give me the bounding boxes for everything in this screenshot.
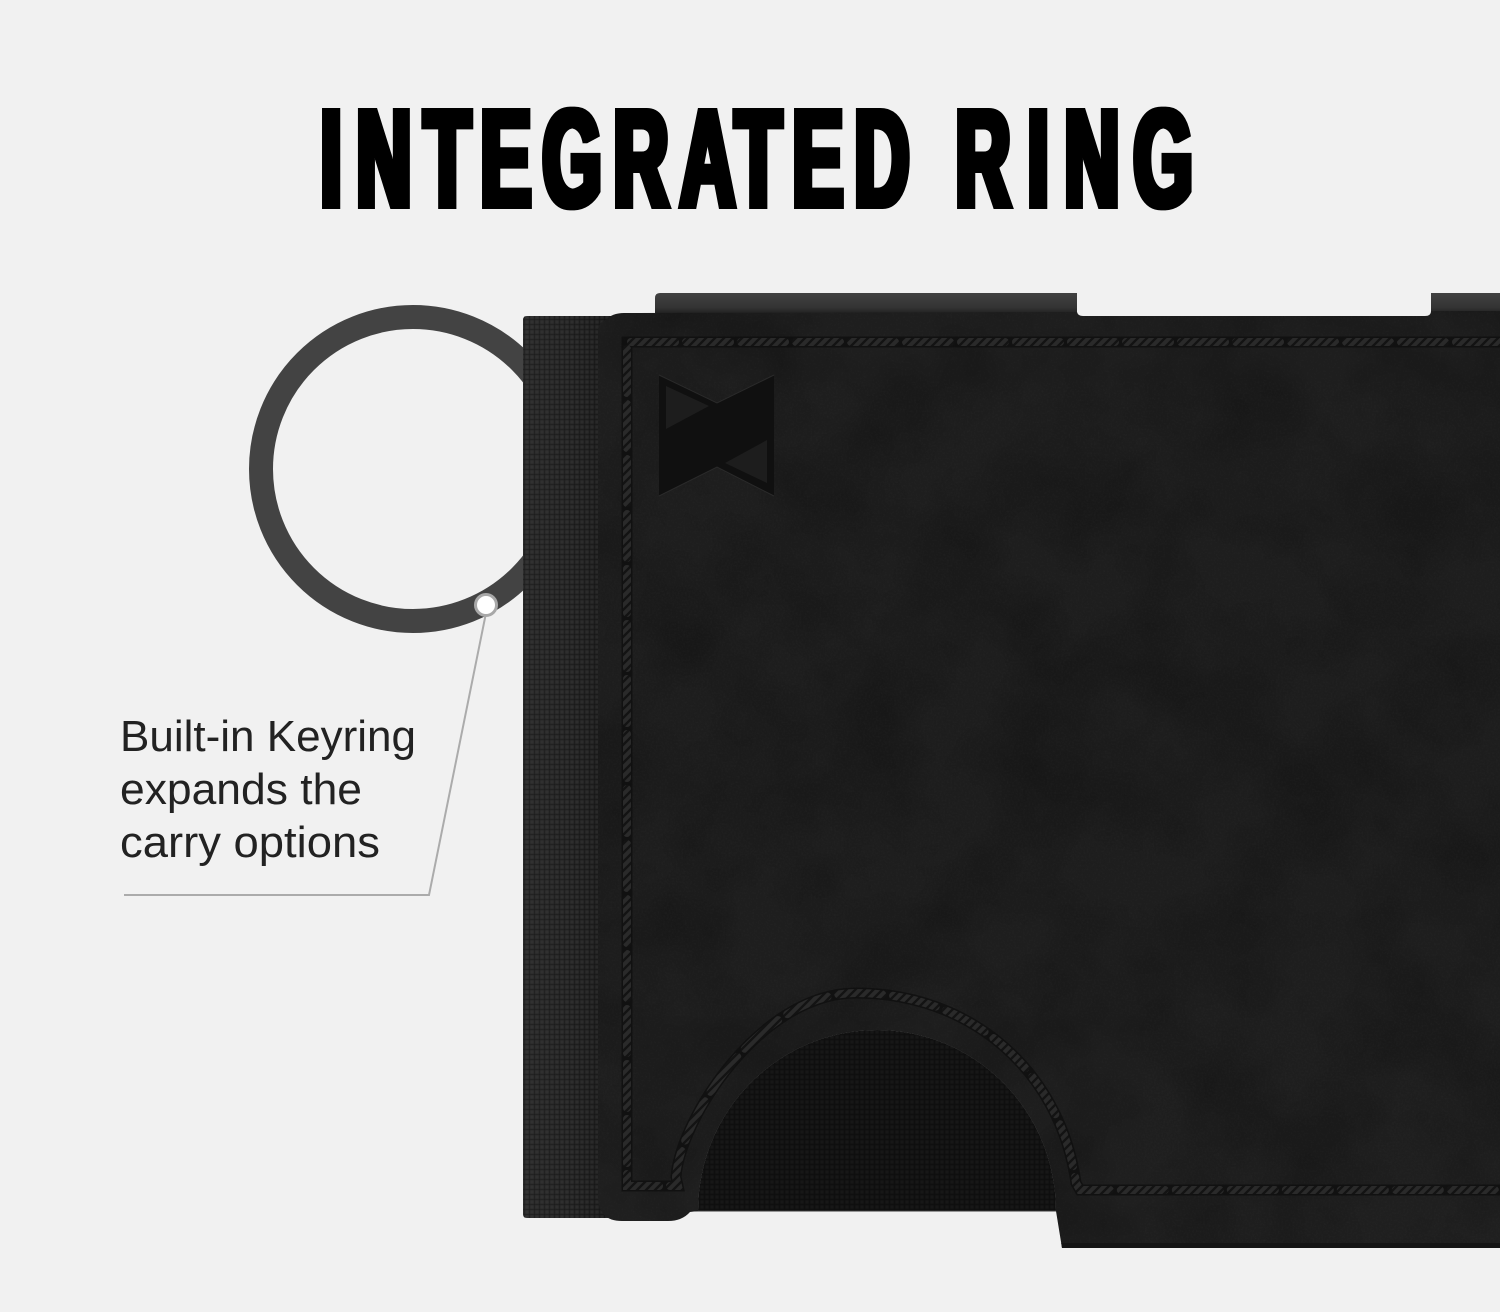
title: INTEGRATED RING [321, 81, 1193, 236]
fabric back panel [523, 316, 640, 1218]
icon: key ring [261, 317, 565, 621]
card notch opening [690, 1000, 1060, 1211]
wallet illustration [523, 293, 1500, 1255]
callout text: expands the [120, 765, 362, 814]
top metal tabs [655, 293, 1500, 318]
leather front panel [590, 305, 1500, 1255]
callout text [120, 712, 416, 867]
stitching [627, 342, 1500, 1190]
icon: debossed logo [659, 375, 774, 496]
callout: leader line and marker [124, 594, 496, 895]
callout text: Built-in Keyring [120, 712, 416, 761]
callout text: carry options [120, 818, 380, 867]
